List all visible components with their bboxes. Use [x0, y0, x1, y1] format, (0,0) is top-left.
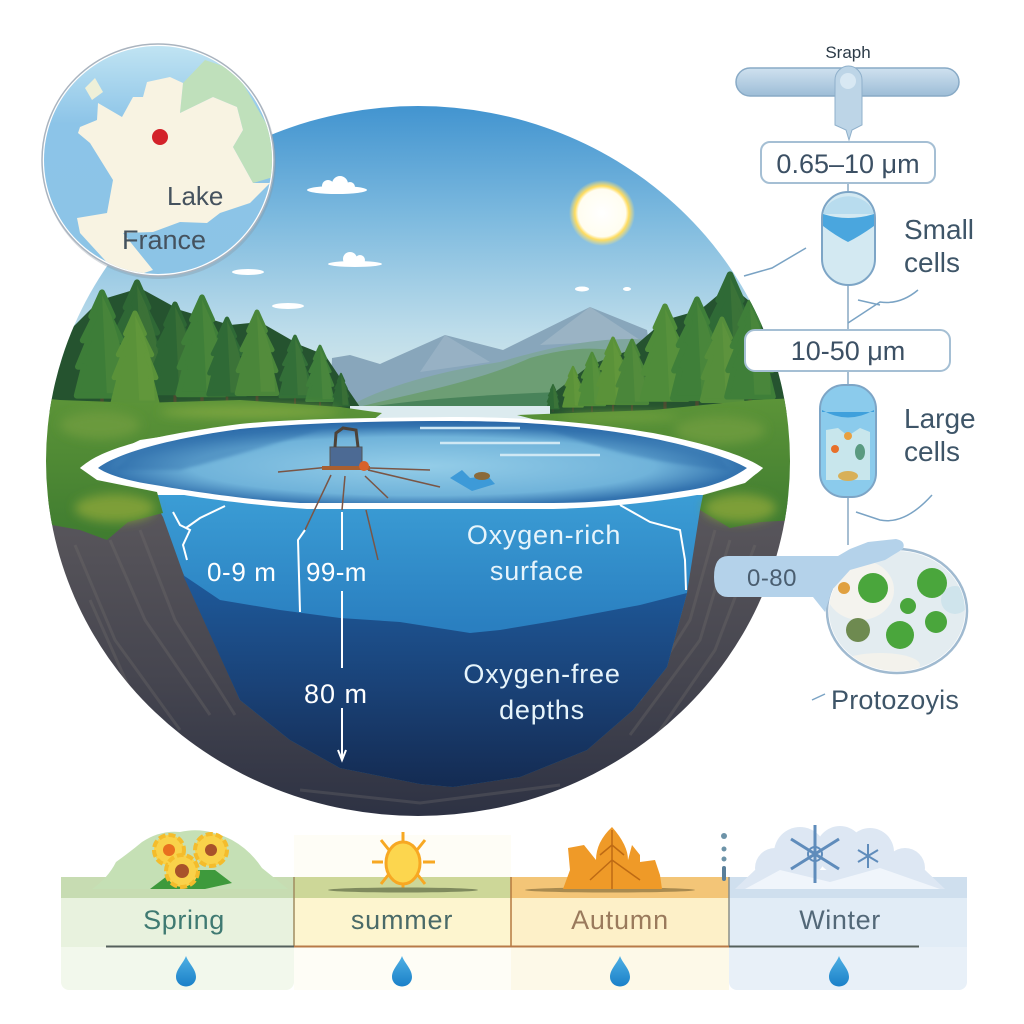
upper oxygen-rich water — [150, 495, 710, 787]
label: oxygen-free depths: Oxygen-free — [463, 659, 621, 689]
label: large cells: Large — [904, 403, 976, 434]
grass bank: left — [40, 398, 382, 540]
label: 10-50 um — [745, 330, 950, 371]
map land: islands — [85, 78, 103, 100]
timeline rule — [106, 946, 919, 948]
map label: Lake: Lake — [167, 181, 223, 211]
forest backing mass: right — [550, 296, 787, 414]
clouds — [232, 176, 631, 309]
icon: winter snow and snowflake — [735, 825, 945, 889]
map label: France: France — [122, 225, 206, 255]
map pin — [152, 129, 168, 145]
rock cliff: basin wall — [40, 500, 800, 830]
depth line with arrow — [338, 512, 346, 760]
sky — [52, 106, 784, 399]
forest backing mass: left — [46, 288, 362, 412]
depth label: 0-9 m: 0-9 m — [207, 557, 276, 587]
monitoring platform — [322, 428, 370, 471]
panel: seasons strip — [61, 825, 967, 990]
squiggles — [744, 248, 932, 700]
panel: lake cross-section globe — [40, 100, 800, 830]
label: oxygen-free depths: depths — [499, 695, 585, 725]
label: 10-50 um: 10-50 μm — [791, 336, 905, 366]
icon: protozoa micrograph — [825, 545, 970, 677]
icon: autumn leaves — [525, 827, 695, 892]
spring column — [61, 877, 294, 990]
deep oxygen-free layer — [183, 575, 687, 787]
dividers — [294, 877, 729, 947]
far shore water — [350, 406, 550, 414]
depth label: 99-m: 99-m — [306, 557, 367, 587]
map land: neighbours — [180, 60, 280, 183]
summer column — [294, 835, 511, 990]
label: Protozoyis: Protozoyis — [831, 685, 959, 715]
label: Spring: Spring — [143, 905, 225, 935]
autumn column — [511, 877, 729, 990]
panel: size-fraction column — [714, 43, 976, 715]
icon: water drop winter — [829, 956, 849, 986]
label: Winter: Winter — [799, 905, 881, 935]
forest: left — [77, 282, 349, 415]
label: small cells: cells — [904, 247, 960, 278]
grass bank: right — [517, 398, 800, 528]
panel: locator map — [40, 40, 280, 280]
icon: water drop autumn — [610, 956, 630, 986]
heading: Sraph — [825, 43, 871, 62]
icon: large cells capsule — [820, 385, 876, 497]
label: Autumn: Autumn — [571, 905, 669, 935]
label: 0.65-10 um — [761, 142, 935, 183]
callout pill: 0-80 — [714, 539, 904, 612]
connector lines — [847, 183, 849, 545]
label: large cells: cells — [904, 436, 960, 467]
mountains — [330, 307, 660, 412]
sensor cables — [278, 467, 440, 560]
label: oxygen-rich surface: surface — [490, 556, 584, 586]
depth label: 80 m: 80 m — [304, 679, 368, 709]
grass highlights: left — [60, 406, 340, 522]
icon: summer sun — [328, 832, 478, 892]
map sea — [40, 40, 280, 280]
map land: France — [77, 77, 270, 280]
sun — [569, 180, 635, 246]
grass highlights: right — [560, 413, 776, 522]
floating fish icon — [450, 470, 495, 491]
icon: filter T-bar — [736, 66, 959, 140]
winter column — [729, 877, 967, 990]
icon: water drop spring — [176, 956, 196, 986]
callout pill: 0-80: 0-80 — [747, 565, 797, 592]
forest: right — [547, 275, 773, 412]
map drop shadow — [42, 45, 276, 279]
rock strata — [75, 530, 755, 803]
icon: small cells capsule — [822, 192, 875, 285]
label: summer: summer — [351, 905, 453, 935]
lake surface — [98, 421, 747, 503]
label: 0.65-10 um: 0.65–10 μm — [776, 149, 920, 179]
icon: water drop summer — [392, 956, 412, 986]
label: small cells: Small — [904, 214, 974, 245]
white shoreline cracks — [173, 505, 686, 612]
lake rim — [80, 417, 763, 509]
icon: spring flowers — [92, 830, 288, 889]
dots — [721, 833, 727, 881]
label: oxygen-rich surface: Oxygen-rich — [467, 520, 621, 550]
